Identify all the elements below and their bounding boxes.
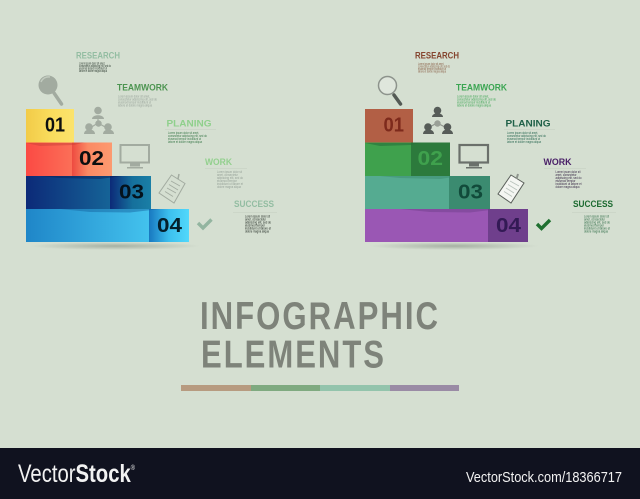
label: teamwork: labore et dolore magna aliqua bbox=[457, 104, 491, 108]
label: research: RESEARCH bbox=[415, 50, 459, 62]
label: planing: PLANING bbox=[166, 118, 212, 130]
label: research: eiusmod tempor incididunt ut bbox=[79, 66, 107, 70]
icon: monitor bbox=[460, 145, 488, 168]
step 03 teal bbox=[365, 176, 490, 209]
title: INFOGRAPHIC bbox=[200, 295, 440, 338]
step 01 brown: 01 bbox=[384, 114, 404, 136]
label: work: dolore magna aliqua bbox=[556, 185, 580, 189]
label: work bbox=[205, 157, 247, 189]
label: work: dolore magna aliqua bbox=[217, 185, 241, 189]
label: teamwork: Lorem ipsum dolor sit amet, bbox=[118, 94, 150, 98]
label: work: amet, consectetur bbox=[556, 173, 577, 177]
label: success: SUCCESS bbox=[234, 199, 274, 210]
label: research bbox=[76, 50, 120, 73]
icon: check mark bbox=[537, 220, 550, 228]
label: planing: consectetur adipiscing elit, sed do bbox=[168, 134, 207, 138]
label: teamwork: consectetur adipiscing elit, sed do bbox=[457, 98, 496, 102]
step 04 light blue: 04 bbox=[157, 214, 183, 237]
icon: check mark bbox=[198, 220, 212, 228]
label: teamwork: consectetur adipiscing elit, sed do bbox=[118, 98, 157, 102]
panel: left colourful staircase infographic bbox=[26, 50, 277, 250]
step 03 dark blue bbox=[26, 176, 151, 209]
label: research: RESEARCH bbox=[76, 50, 120, 62]
label: research: consectetur adipiscing elit, sed do bbox=[418, 64, 450, 68]
label: work bbox=[544, 157, 586, 189]
label: work: incididunt ut labore et bbox=[217, 182, 243, 186]
label: work: eiusmod tempor bbox=[556, 179, 576, 183]
step 01 yellow bbox=[26, 109, 74, 143]
label: teamwork bbox=[117, 82, 168, 108]
step 04 light blue bbox=[26, 209, 189, 242]
label: success: Lorem ipsum dolor sit bbox=[584, 214, 609, 218]
label: research: Lorem ipsum dolor sit amet, bbox=[79, 62, 105, 66]
label: teamwork: Lorem ipsum dolor sit amet, bbox=[457, 94, 489, 98]
panel: right muted staircase infographic bbox=[365, 50, 616, 250]
label: success: dolore magna aliqua bbox=[245, 230, 269, 234]
step 01 yellow: 01 bbox=[45, 114, 65, 136]
label: success: SUCCESS bbox=[573, 199, 613, 210]
label: research: Lorem ipsum dolor sit amet, bbox=[418, 62, 444, 66]
icon: clipboard bbox=[498, 174, 524, 203]
step 02 green bbox=[365, 142, 450, 176]
label: success: Lorem ipsum dolor sit bbox=[245, 214, 270, 218]
label: planing bbox=[504, 118, 555, 144]
step 03 dark blue: 03 bbox=[119, 180, 144, 204]
footer logo: VectorStock bbox=[18, 460, 144, 488]
label: planing: eiusmod tempor incididunt ut bbox=[507, 137, 540, 141]
label: research: labore et dolore magna aliqua bbox=[79, 69, 107, 73]
label: work: adipiscing elit, sed do bbox=[217, 176, 243, 180]
step 02 orange: 02 bbox=[79, 147, 104, 170]
label: success bbox=[233, 199, 277, 234]
label: teamwork: TEAMWORK bbox=[456, 82, 507, 94]
label: research: consectetur adipiscing elit, sed do bbox=[79, 64, 111, 68]
label: work: incididunt ut labore et bbox=[556, 182, 582, 186]
stair shadow bbox=[369, 242, 539, 250]
label: planing: eiusmod tempor incididunt ut bbox=[168, 137, 201, 141]
label: planing: Lorem ipsum dolor sit amet, bbox=[507, 131, 538, 135]
label: success: dolore magna aliqua bbox=[584, 230, 608, 234]
label: planing: labore et dolore magna aliqua bbox=[507, 140, 541, 144]
label: success: eiusmod tempor bbox=[584, 224, 605, 228]
label: success: eiusmod tempor bbox=[245, 224, 266, 228]
label: success bbox=[572, 199, 616, 234]
label: teamwork: eiusmod tempor incididunt ut bbox=[457, 100, 490, 104]
label: work: Lorem ipsum dolor sit bbox=[217, 170, 242, 174]
icon: team bbox=[84, 107, 114, 134]
step 02 orange bbox=[26, 142, 112, 176]
label: success: incididunt ut labore et bbox=[245, 226, 271, 230]
step 04 purple: 04 bbox=[496, 214, 522, 237]
label: teamwork: TEAMWORK bbox=[117, 82, 168, 94]
label: research bbox=[415, 50, 459, 74]
step 04 purple bbox=[365, 209, 528, 242]
stair shadow bbox=[30, 242, 200, 250]
label: research: eiusmod tempor incididunt ut bbox=[418, 67, 446, 71]
icon: team bbox=[423, 107, 453, 134]
label: success: amet, consectetur bbox=[245, 218, 267, 222]
title: ELEMENTS bbox=[201, 334, 386, 376]
step 03 teal: 03 bbox=[458, 180, 483, 204]
label: success: incididunt ut labore et bbox=[584, 226, 610, 230]
label: success: adipiscing elit, sed do bbox=[245, 220, 271, 224]
label: work: amet, consectetur bbox=[217, 173, 239, 177]
label: teamwork: labore et dolore magna aliqua bbox=[118, 104, 152, 108]
label: planing: PLANING bbox=[506, 118, 550, 130]
icon: magnifier bbox=[38, 76, 62, 104]
label: work: Lorem ipsum dolor sit bbox=[556, 170, 580, 174]
step 02 green: 02 bbox=[418, 147, 443, 170]
label: work: adipiscing elit, sed do bbox=[556, 176, 582, 180]
icon: magnifier bbox=[378, 76, 400, 104]
label: work: WORK bbox=[205, 157, 232, 168]
label: planing: Lorem ipsum dolor sit amet, bbox=[168, 131, 199, 135]
footer logo: ® bbox=[131, 464, 136, 472]
step 01 brown bbox=[365, 109, 413, 143]
title bbox=[200, 295, 440, 376]
label: work: WORK bbox=[544, 157, 572, 168]
label: work: eiusmod tempor bbox=[217, 179, 238, 183]
icon: clipboard bbox=[159, 174, 185, 203]
label: planing: labore et dolore magna aliqua bbox=[168, 140, 202, 144]
icon: monitor bbox=[120, 145, 149, 168]
label: success: amet, consectetur bbox=[584, 218, 606, 222]
label: teamwork: eiusmod tempor incididunt ut bbox=[118, 100, 151, 104]
footer bar bbox=[0, 448, 640, 499]
label: planing: consectetur adipiscing elit, sed do bbox=[507, 134, 546, 138]
label: teamwork bbox=[456, 82, 507, 108]
label: planing bbox=[165, 118, 216, 144]
label: success: adipiscing elit, sed do bbox=[584, 220, 610, 224]
colour bar bbox=[181, 385, 459, 391]
label: research: labore et dolore magna aliqua bbox=[418, 70, 446, 74]
